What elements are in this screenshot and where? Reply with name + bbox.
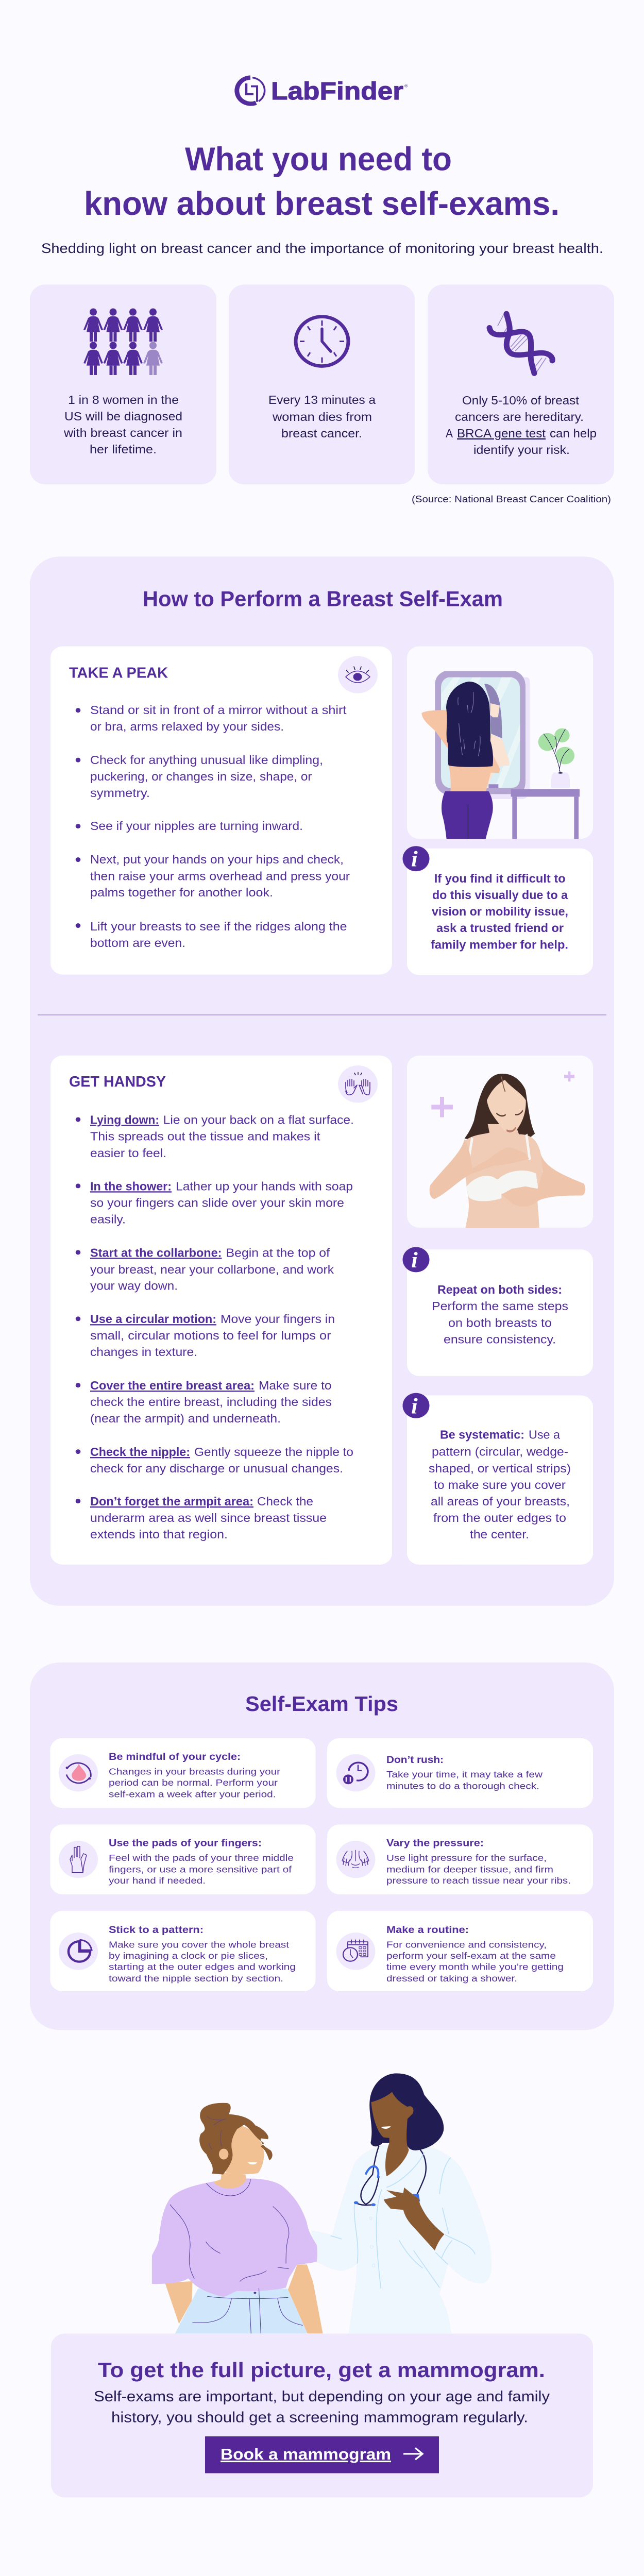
title: What you need to: [185, 140, 452, 177]
icon: info: i: [411, 1394, 418, 1418]
section heading: How to Perform a Breast Self-Exam: [143, 587, 503, 611]
info text: ask a trusted friend or: [436, 921, 564, 935]
icon: pressing hands: [336, 1841, 375, 1878]
tip: vary the pressure: [327, 1824, 593, 1894]
tip text: Be mindful of your cycle:: [109, 1752, 241, 1762]
heading: get handsy: GET HANDSY: [69, 1074, 166, 1090]
tip text: starting at the outer edges and working: [109, 1961, 296, 1972]
bullet list: get handsy: Check the nipple:: [90, 1446, 190, 1459]
icon: info: i: [411, 846, 418, 871]
bullet list: get handsy: In the shower:: [90, 1180, 172, 1193]
icon: pie chart: [59, 1933, 98, 1970]
info text: Use a: [529, 1428, 560, 1442]
tip text: dressed or taking a shower.: [386, 1973, 517, 1984]
info text: Repeat on both sides:: [437, 1283, 562, 1297]
heading: take a peak: TAKE A PEAK: [69, 665, 168, 681]
tip text: [386, 1925, 564, 1984]
tip text: Use light pressure for the surface,: [386, 1852, 547, 1863]
info text: on both breasts to: [448, 1316, 552, 1330]
info text: [431, 872, 568, 952]
button: book a mammogram: Book a mammogram: [221, 2446, 391, 2463]
panel: self-exam tips: [30, 1663, 614, 2030]
bullet list: take a peak: bottom are even.: [90, 937, 185, 950]
cta heading: To get the full picture, get a mammogram.: [98, 2358, 545, 2382]
bullet list: get handsy: Make sure to: [259, 1379, 332, 1393]
bullet list: get handsy: [76, 1113, 354, 1541]
tip text: Changes in your breasts during your: [109, 1766, 280, 1776]
icon: cycle drop: [59, 1754, 98, 1791]
title: know about breast self-exams.: [84, 185, 560, 222]
stat text: 1 in 8 women: US will be diagnosed: [64, 410, 182, 423]
tip text: Use the pads of your fingers:: [109, 1838, 262, 1849]
tip text: Make a routine:: [386, 1925, 469, 1936]
stat card: hereditary: [428, 284, 614, 484]
card: take a peak: [50, 646, 392, 975]
info text: If you find it difficult to: [434, 872, 566, 886]
logo: LabFinder: ®: [404, 83, 408, 88]
section heading: Self-Exam Tips: [245, 1692, 398, 1716]
stat card: every 13 minutes: [229, 284, 415, 484]
icon: clock: [296, 317, 348, 366]
logo: LabFinder: LabFinder: [271, 77, 403, 105]
title: [84, 140, 560, 222]
bullet list: get handsy: check for any discharge or unusual changes.: [90, 1462, 343, 1476]
illustration card: woman at mirror: [407, 646, 593, 839]
stat text: every 13 minutes: [268, 394, 376, 440]
stat card: 1 in 8 women: [30, 284, 216, 484]
bullet list: get handsy: your way down.: [90, 1279, 178, 1293]
tip text: period can be normal. Perform your: [109, 1777, 278, 1788]
stat text: 1 in 8 women: 1 in 8 women in the: [68, 394, 179, 407]
info card: visual difficulty: [403, 846, 593, 975]
info text: Be systematic:: [440, 1428, 524, 1442]
info text: from the outer edges to: [433, 1512, 566, 1525]
info text: do this visually due to a: [432, 888, 568, 902]
bullet list: get handsy: Move your fingers in: [221, 1313, 335, 1326]
bullet list: get handsy: This spreads out the tissue and makes it: [90, 1130, 320, 1143]
tip text: Feel with the pads of your three middle: [109, 1852, 294, 1863]
tip text: Take your time, it may take a few: [386, 1769, 543, 1780]
tip text: toward the nipple section by section.: [109, 1973, 283, 1984]
icon: DNA helix: [489, 314, 552, 374]
tip text: fingers, or use a more sensitive part of: [109, 1864, 292, 1874]
tip text: [109, 1752, 280, 1799]
cta body text: [94, 2389, 550, 2426]
image card: woman performing self-exam: [407, 1056, 593, 1228]
tip text: your hand if needed.: [109, 1875, 206, 1886]
bullet list: take a peak: Lift your breasts to see if the ridges along the: [90, 920, 347, 934]
bullet list: take a peak: palms together for another look.: [90, 886, 273, 900]
panel: how to perform a breast self-exam: [30, 556, 614, 1606]
tip: make a routine: [327, 1911, 593, 1991]
info text: to make sure you cover: [434, 1479, 566, 1492]
info text: the center.: [470, 1528, 529, 1541]
bullet list: get handsy: extends into that region.: [90, 1528, 228, 1541]
bullet list: take a peak: Check for anything unusual like dimpling,: [90, 754, 323, 767]
illustration: patient and doctor: [152, 2073, 492, 2333]
tip text: For convenience and consistency,: [386, 1939, 547, 1950]
tip text: self-exam a week after your period.: [109, 1789, 276, 1799]
tip text: pressure to reach tissue near your ribs.: [386, 1875, 571, 1886]
stat text: every 13 minutes: woman dies from: [272, 411, 372, 424]
cta body text: history, you should get a screening mammogram regularly.: [111, 2410, 528, 2426]
icon: info: [403, 1247, 430, 1273]
tip: stick to a pattern: [50, 1911, 315, 1991]
info text: ensure consistency.: [444, 1333, 556, 1347]
tip text: Make sure you cover the whole breast: [109, 1939, 289, 1950]
card: get handsy: [50, 1056, 392, 1565]
bullet list: get handsy: Cover the entire breast area:: [90, 1379, 255, 1393]
icon: stopwatch clock: [336, 1754, 375, 1791]
bullet list: take a peak: See if your nipples are turning inward.: [90, 820, 303, 833]
stat text: hereditary: A: [446, 427, 453, 440]
tip text: Vary the pressure:: [386, 1838, 484, 1849]
bullet list: get handsy: Use a circular motion:: [90, 1313, 216, 1326]
icon: raised hands: [338, 1065, 378, 1103]
info card: repeat on both sides: [403, 1247, 593, 1376]
doctor figure: [311, 2073, 492, 2333]
bullet list: take a peak: puckering, or changes in size, shape, or: [90, 770, 312, 784]
bullet list: get handsy: Start at the collarbone:: [90, 1246, 222, 1260]
bullet list: take a peak: [76, 704, 350, 950]
stat text: hereditary: cancers are hereditary.: [455, 411, 584, 424]
bullet list: get handsy: Lying down:: [90, 1113, 159, 1127]
icon: eight women figures: [83, 309, 163, 375]
bullet list: get handsy: underarm area as well since breast tissue: [90, 1512, 327, 1525]
bullet list: get handsy: Check the: [257, 1495, 313, 1509]
bullet list: take a peak: Next, put your hands on your hips and check,: [90, 853, 344, 867]
bullet list: get handsy: changes in texture.: [90, 1346, 197, 1359]
info text: vision or mobility issue,: [432, 905, 568, 919]
button: book a mammogram: [205, 2436, 439, 2473]
tip: don't rush: [327, 1738, 593, 1808]
icon: fingers: [59, 1841, 98, 1878]
stat text: every 13 minutes: breast cancer.: [281, 427, 362, 440]
bullet list: take a peak: Stand or sit in front of a mirror without a shirt: [90, 704, 347, 717]
cta body text: Self-exams are important, but depending on your age and family: [94, 2389, 550, 2405]
tip: be mindful of your cycle: [50, 1738, 315, 1808]
icon: info: i: [411, 1247, 418, 1273]
tip text: medium for deeper tissue, and firm: [386, 1864, 553, 1874]
stat text: hereditary: [446, 394, 597, 457]
icon: info: [403, 1393, 430, 1418]
tip text: Don’t rush:: [386, 1754, 444, 1766]
info text: [429, 1428, 571, 1541]
tip text: Stick to a pattern:: [109, 1925, 204, 1936]
info text: family member for help.: [431, 938, 568, 952]
info text: Perform the same steps: [432, 1299, 568, 1313]
stat text: hereditary: can help: [550, 427, 597, 440]
bullet list: get handsy: so your fingers can slide over your skin more: [90, 1196, 344, 1210]
bullet list: get handsy: your breast, near your collarbone, and work: [90, 1263, 334, 1277]
bullet list: get handsy: Lie on your back on a flat surface.: [163, 1113, 354, 1127]
tip text: [109, 1925, 296, 1984]
stat text: hereditary: BRCA gene test: [457, 427, 546, 440]
icon: eye: [338, 656, 378, 693]
tip text: [386, 1754, 543, 1791]
bullet list: get handsy: Lather up your hands with soap: [176, 1180, 353, 1193]
bullet list: get handsy: small, circular motions to feel for lumps or: [90, 1329, 331, 1343]
tip: use the pads of your fingers: [50, 1824, 315, 1894]
bullet list: get handsy: Begin at the top of: [226, 1246, 330, 1260]
icon: calendar and clock: [336, 1933, 375, 1970]
bullet list: get handsy: (near the armpit) and underneath.: [90, 1412, 281, 1426]
tip text: perform your self-exam at the same: [386, 1951, 556, 1961]
stat text: hereditary: identify your risk.: [473, 444, 570, 457]
tip text: by imagining a clock or pie slices,: [109, 1951, 268, 1961]
stat text: every 13 minutes: Every 13 minutes a: [268, 394, 376, 407]
tip text: time every month while you’re getting: [386, 1961, 564, 1972]
subtitle: Shedding light on breast cancer and the importance of monitoring your breast health.: [41, 241, 603, 256]
icon: arrow: [403, 2448, 422, 2460]
source note: (Source: National Breast Cancer Coalition): [412, 494, 611, 505]
bullet list: get handsy: Don’t forget the armpit area:: [90, 1495, 253, 1509]
info text: pattern (circular, wedge-: [432, 1445, 568, 1459]
tip text: minutes to do a thorough check.: [386, 1781, 539, 1791]
stat text: 1 in 8 women: her lifetime.: [90, 443, 157, 456]
bullet list: take a peak: symmetry.: [90, 787, 150, 800]
stat text: hereditary: Only 5-10% of breast: [462, 394, 579, 408]
info text: shaped, or vertical strips): [429, 1462, 571, 1476]
stat text: 1 in 8 women: with breast cancer in: [63, 427, 182, 440]
bullet list: take a peak: then raise your arms overhead and press your: [90, 870, 350, 883]
icon: info: [403, 846, 430, 871]
bullet list: get handsy: Gently squeeze the nipple to: [194, 1446, 353, 1459]
bullet list: get handsy: easily.: [90, 1213, 126, 1226]
stat text: 1 in 8 women: [63, 394, 182, 456]
bullet list: get handsy: check the entire breast, including the sides: [90, 1396, 332, 1409]
info text: all areas of your breasts,: [431, 1495, 570, 1509]
tip text: [386, 1838, 571, 1886]
tip text: [109, 1838, 294, 1886]
bullet list: take a peak: or bra, arms relaxed by your sides.: [90, 720, 284, 734]
info card: be systematic: [403, 1393, 593, 1565]
call to action panel: [51, 2333, 593, 2498]
patient figure: [152, 2103, 323, 2333]
bullet list: get handsy: easier to feel.: [90, 1147, 166, 1160]
info text: [432, 1283, 568, 1347]
